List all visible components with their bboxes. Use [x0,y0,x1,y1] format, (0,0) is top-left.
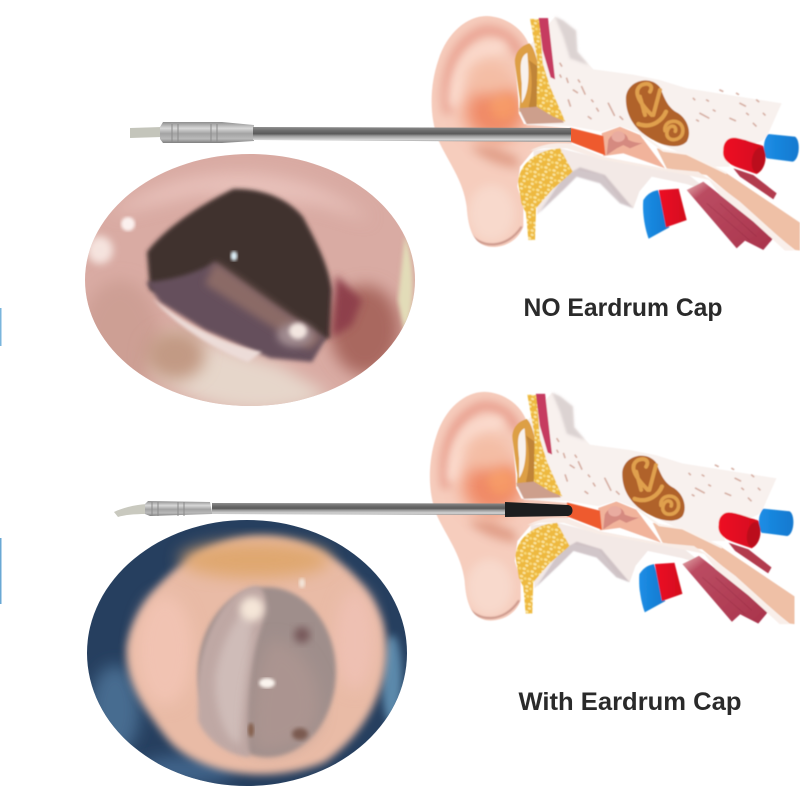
probe tube [212,503,506,515]
probe handle [145,501,212,516]
lower membrane [146,262,326,362]
otoscope probe: with cap [114,501,572,517]
label: with cap: With Eardrum Cap [518,688,742,716]
ridge [205,262,323,350]
membrane [252,640,319,752]
ear anatomy: with cap [430,392,795,624]
probe tube [253,127,571,142]
probe handle [160,122,254,143]
highlight [230,251,238,261]
eardrum [198,587,336,757]
otoscope probe: no cap [130,122,571,143]
left edge marks [0,308,2,604]
endoscope photo: no cap [80,150,420,411]
ear anatomy: no cap [432,16,800,251]
canal wall shading [86,282,156,382]
dark membrane [147,189,332,345]
label: no cap: NO Eardrum Cap [524,294,722,322]
probe tip [130,127,162,138]
ear canal ring [127,536,386,774]
red patch [332,275,362,338]
eardrum cap [505,502,572,517]
probe tip [114,504,146,517]
malleus fold [198,586,265,757]
endoscope photo: with cap [80,515,410,790]
